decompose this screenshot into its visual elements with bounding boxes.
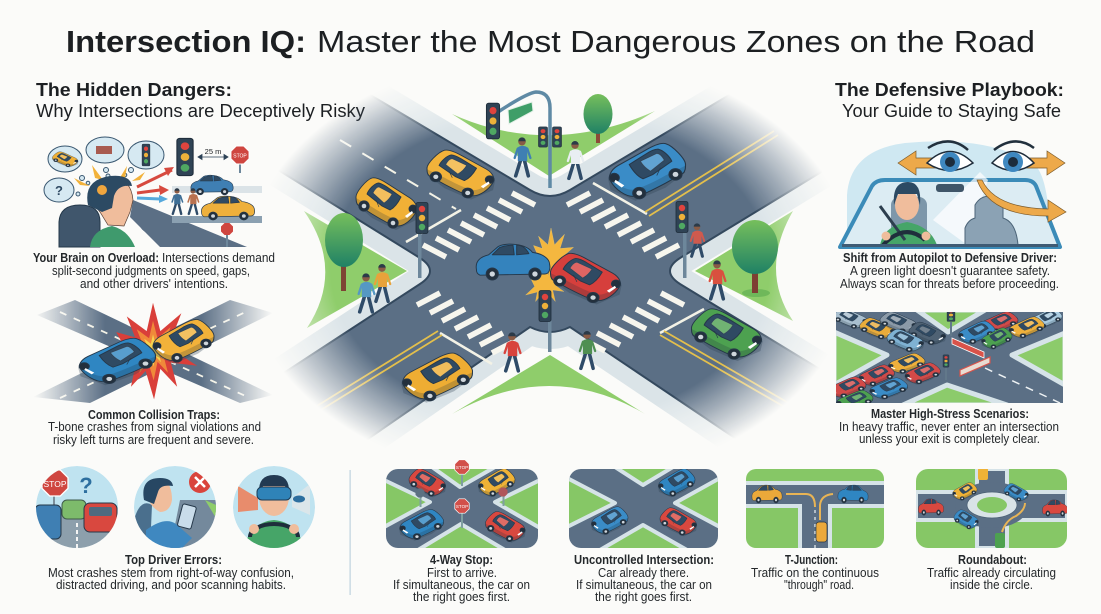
caption: defensive driver: [840, 251, 1059, 291]
caption: defensive driver: A green light doesn't guarantee safety.: [850, 264, 1050, 278]
traffic signal and distance: [177, 138, 193, 176]
caption: high-stress scenarios: [839, 407, 1059, 446]
title: Intersection IQ:: [66, 24, 306, 59]
crosswalk: south-west: [417, 293, 515, 353]
caption: driver errors: Most crashes stem from right-of-way confusion,: [48, 566, 294, 580]
crosswalk: south-east: [590, 293, 684, 351]
caption: collision traps: Common Collision Traps:: [88, 408, 220, 422]
illustration: congested intersection: [836, 312, 1063, 403]
illustration: collision traps: [33, 300, 273, 403]
light beam: [933, 172, 988, 244]
illustration: brain on overload: ?: [151, 216, 159, 231]
cars: [191, 175, 233, 195]
sidewalks: [287, 96, 814, 437]
road: [130, 200, 247, 247]
caption: brain on overload: and other drivers' intentions.: [80, 277, 228, 291]
caption: brain on overload: [33, 251, 275, 291]
caption: 4-way stop: If simultaneous, the car on: [393, 578, 530, 592]
mirror: [936, 184, 964, 192]
small stop: [226, 232, 228, 247]
yellow car: [152, 319, 214, 364]
caption: uncontrolled intersection: the right goes first.: [595, 590, 692, 604]
car: blue north-east lane: [608, 143, 686, 201]
windshield: [840, 180, 1060, 247]
illustration: brain on overload: [44, 137, 262, 247]
caption: 4-way stop: the right goes first.: [413, 590, 510, 604]
tree north: [584, 94, 612, 143]
burst: [108, 303, 200, 399]
illustration: brain on overload: 25 m: [205, 147, 221, 156]
tree west: [325, 213, 363, 291]
caption: brain on overload: split-second judgments on speed, gaps,: [52, 264, 250, 278]
barriers: [952, 338, 984, 358]
heading: defensive playbook: [835, 80, 1064, 121]
illustration: roundabout: [916, 468, 1068, 548]
caption: T-junction: [751, 553, 879, 592]
caption: defensive driver: Shift from Autopilot to Defensive Driver:: [843, 251, 1057, 265]
caption: high-stress scenarios: Master High-Stress Scenarios:: [871, 407, 1029, 421]
arrows: [898, 151, 940, 175]
caption: uncontrolled intersection: Uncontrolled Intersection:: [574, 553, 714, 567]
stop signs: [416, 460, 508, 528]
icon: right-of-way confusion: ?: [79, 473, 93, 498]
red arrows: [137, 170, 172, 187]
thought bubbles: [44, 137, 170, 234]
caption: T-junction: T-Junction:: [785, 553, 838, 567]
caption: roundabout: Roundabout:: [958, 553, 1027, 567]
caption: uncontrolled intersection: Car already there.: [598, 566, 689, 580]
illustration: 4-way stop: [384, 467, 540, 550]
caption: roundabout: [927, 553, 1056, 592]
caption: collision traps: risky left turns are frequent and severe.: [53, 433, 254, 447]
car: yellow north-west lane: [427, 150, 495, 200]
road surface: [282, 96, 819, 438]
traffic light south: [539, 290, 552, 352]
traffic light west: [416, 202, 428, 278]
illustration: brain on overload: ?: [55, 183, 63, 198]
central intersection illustration: [280, 96, 820, 438]
pedestrians: [359, 137, 725, 371]
driver: [880, 222, 937, 245]
caption: uncontrolled intersection: If simultaneous, the car on: [576, 578, 712, 592]
caption: brain on overload: Your Brain on Overload:: [33, 251, 159, 265]
illustration: defensive driver windshield: [840, 141, 1066, 247]
caption: roundabout: inside the circle.: [950, 578, 1033, 592]
heading: defensive playbook: The Defensive Playbook:: [835, 80, 1064, 100]
caption: high-stress scenarios: unless your exit is completely clear.: [859, 432, 1040, 446]
grass corners: [304, 111, 793, 414]
stuck cars: [836, 312, 1062, 403]
stop sign: [239, 160, 241, 173]
car: yellow south-west lane: [401, 353, 472, 403]
tree east: [732, 220, 778, 297]
title: [66, 24, 1035, 59]
illustration: T-junction: [746, 469, 884, 548]
illustration: brain on overload: STOP: [233, 154, 247, 160]
car: yellow west approach: [356, 178, 418, 230]
title: Master the Most Dangerous Zones on the Road: [317, 24, 1035, 59]
heading: hidden dangers: The Hidden Dangers:: [36, 80, 232, 100]
yellow flashes: [74, 165, 145, 186]
caption: brain on overload: Intersections demand: [162, 251, 275, 265]
divider: [350, 470, 351, 595]
caption: defensive driver: Always scan for threats before proceeding.: [840, 277, 1059, 291]
caption: 4-way stop: 4-Way Stop:: [430, 553, 493, 567]
eyes: [927, 152, 973, 170]
traffic light mast and street sign: [486, 92, 562, 188]
icon: right-of-way confusion: STOP: [44, 479, 67, 489]
icon: poor scanning: [233, 466, 315, 550]
caption: 4-way stop: [393, 553, 530, 604]
sky: [847, 141, 1050, 247]
caption: collision traps: T-bone crashes from signal violations and: [48, 420, 261, 434]
caption: driver errors: distracted driving, and poor scanning habits.: [56, 578, 286, 592]
car: blue crash: [476, 244, 550, 280]
caption: collision traps: [48, 408, 261, 447]
heading: hidden dangers: Why Intersections are Deceptively Risky: [36, 101, 365, 121]
collision at centre: [476, 228, 622, 308]
crash burst: [526, 228, 574, 308]
caption: high-stress scenarios: In heavy traffic, never enter an intersection: [839, 420, 1059, 434]
heading: defensive playbook: Your Guide to Staying Safe: [842, 101, 1061, 121]
stop signs: STOP: [456, 504, 468, 509]
illustration: uncontrolled intersection: [567, 467, 720, 550]
passenger seat: [965, 196, 1018, 245]
icon: right-of-way confusion: [35, 466, 118, 550]
caption: 4-way stop: First to arrive.: [427, 566, 497, 580]
caption: driver errors: Top Driver Errors:: [125, 553, 222, 567]
car: green south-east lane: [692, 309, 763, 361]
traffic light east: [676, 202, 688, 278]
driver: [59, 205, 100, 247]
caption: roundabout: Traffic already circulating: [927, 566, 1056, 580]
crosswalk: north-east: [567, 193, 679, 257]
blue car: [78, 338, 156, 385]
driver seat: [891, 197, 927, 237]
signals: [950, 322, 952, 336]
icon: distracted driving: [134, 466, 216, 552]
caption: uncontrolled intersection: [574, 553, 714, 604]
stop signs: STOP: [456, 465, 468, 470]
crossing roads: [33, 300, 273, 403]
heading: hidden dangers: [36, 80, 365, 121]
caption: driver errors: [48, 553, 294, 592]
car: red crash: [550, 253, 622, 304]
caption: T-junction: Traffic on the continuous: [751, 566, 879, 580]
caption: T-junction: "through" road.: [784, 578, 854, 592]
crosswalk: north-west: [423, 193, 535, 257]
road markings: [312, 131, 792, 413]
